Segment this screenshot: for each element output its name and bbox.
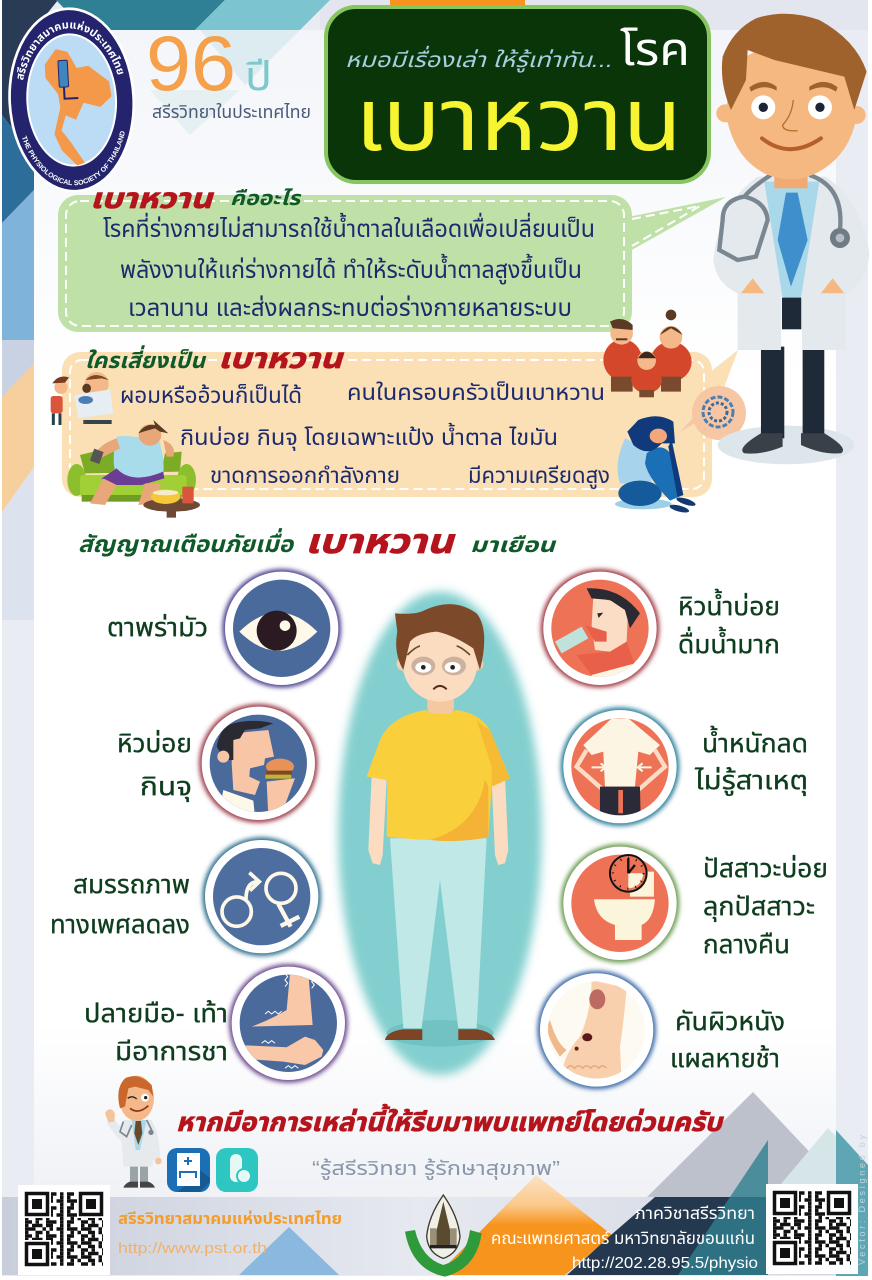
- department URL: http://202.28.95.5/physio: [572, 1255, 758, 1272]
- slogan: “รู้สรีรวิทยา รู้รักษาสุขภาพ”: [312, 1157, 560, 1181]
- warning signs text: สัญญาณเตือนภัยเมื่อ: [78, 528, 294, 557]
- icon: thought bubble with scribble: [680, 386, 746, 440]
- call to action: หากมีอาการเหล่านี้ให้รีบมาพบแพทย์โดยด่วนครับ: [176, 1104, 725, 1137]
- doctor character: [713, 14, 869, 464]
- definition line 1: โรคที่ร่างกายไม่สามารถใช้น้ำตาลในเลือดเพื่อเปลี่ยนเป็น: [103, 212, 595, 243]
- symptom label: weight loss: น้ำหนักลด: [702, 725, 808, 758]
- illustration: stressed woman: [615, 416, 696, 514]
- icon: man drinking water: [541, 569, 659, 688]
- icon: numb feet and hands: [229, 964, 348, 1083]
- symptom label: at night: กลางคืน: [703, 929, 790, 959]
- symptom label: drinks a lot: ดื่มน้ำมาก: [678, 626, 780, 659]
- faculty of medicine seal: [405, 1195, 482, 1277]
- symptom label: reduced: สมรรถภาพ: [73, 869, 190, 899]
- symptom label: thirsty often: หิวน้ำบ่อย: [678, 588, 780, 621]
- illustration: man on sofa: [67, 420, 200, 518]
- word: years: ปี: [245, 55, 272, 99]
- arrives text: มาเยือน: [470, 534, 557, 557]
- central figure and symptom icons: [199, 569, 679, 1089]
- small doctor winking: [105, 1076, 162, 1188]
- icon: toilet at night: [561, 844, 679, 963]
- risk: diet: กินบ่อย กินจุ โดยเฉพาะแป้ง น้ำตาล ไขมัน: [180, 422, 558, 451]
- heading: what is: คืออะไร: [230, 188, 302, 210]
- vector credit: Vector: Designed by: [857, 1134, 867, 1265]
- icon: hospital: [167, 1148, 210, 1192]
- symptom label: wakes to urinate: ลุกปัสสาวะ: [703, 891, 815, 922]
- faculty and university name: คณะแพทยศาสตร์ มหาวิทยาลัยขอนแก่น: [491, 1229, 755, 1248]
- section heading: warning signs: [78, 523, 557, 561]
- icon: blurred vision eye: [222, 569, 341, 688]
- risk: family history: คนในครอบครัวเป็นเบาหวาน: [347, 380, 605, 405]
- heading: diabetes: เบาหวาน: [218, 343, 344, 374]
- risk: stress: มีความเครียดสูง: [468, 463, 610, 489]
- icon: medicine capsule: [216, 1148, 258, 1192]
- title panel: [326, 7, 709, 182]
- illustration: overweight family: [603, 310, 692, 397]
- doctor head: [716, 104, 734, 122]
- definition line 3: เวลานาน และส่งผลกระทบต่อร่างกายหลายระบบ: [128, 294, 572, 322]
- risk: thin or fat: ผอมหรืออ้วนก็เป็นได้: [120, 383, 302, 408]
- symptom label: slow healing: แผลหายช้า: [670, 1043, 780, 1073]
- symptom label: hungry often: หิวบ่อย: [117, 728, 192, 758]
- title tagline: หมอมีเรื่องเล่า ให้รู้เท่าทัน...: [345, 45, 613, 73]
- logo: Physiological Society of Thailand: [8, 7, 135, 190]
- title word: disease: โรค: [620, 23, 690, 75]
- logo ring text: Thai name: สรีรวิทยาสมาคมแห่งประเทศไทย: [17, 21, 124, 80]
- QR code: department website: [766, 1184, 858, 1274]
- society name: สรีรวิทยาสมาคมแห่งประเทศไทย: [118, 1210, 342, 1228]
- symptom label: numbness: มีอาการชา: [115, 1036, 228, 1066]
- symptom label: sexual performance: ทางเพศลดลง: [50, 909, 190, 939]
- diabetes word: เบาหวาน: [305, 523, 455, 561]
- main title: เบาหวาน: [355, 70, 682, 169]
- QR code: society website: [18, 1185, 110, 1275]
- logo ring text: English name: THE PHYSIOLOGICAL SOCIETY OF THAILAND: [22, 131, 125, 186]
- icon: male female symbols: [202, 837, 321, 956]
- icon: map of Thailand: [44, 46, 115, 167]
- panel: who is at risk: [62, 343, 738, 497]
- symptom label: blurred vision: ตาพร่ามัว: [107, 612, 208, 642]
- stethoscope: [719, 175, 840, 260]
- heading: diabetes: เบาหวาน: [90, 183, 214, 214]
- department name: ภาควิชาสรีรวิทยา: [635, 1204, 755, 1223]
- symptom label: hands and feet: ปลายมือ- เท้า: [84, 998, 228, 1028]
- number 96: 96: [146, 19, 236, 107]
- heading: who is at risk: ใครเสี่ยงเป็น: [85, 345, 207, 373]
- society URL: http://www.pst.or.th: [118, 1240, 267, 1257]
- symptom label: unknown cause: ไม่รู้สาเหตุ: [694, 765, 808, 796]
- icon: skin wounds on foot: [537, 971, 656, 1089]
- tired boy: [367, 604, 510, 1047]
- panel: what is diabetes: [58, 183, 726, 332]
- symptom label: eats a lot: กินจุ: [140, 771, 192, 802]
- icon: man eating burger: [199, 704, 318, 823]
- symptom label: itchy skin: คันผิวหนัง: [675, 1006, 785, 1036]
- symptom label: frequent urination: ปัสสาวะบ่อย: [703, 853, 828, 883]
- bottom band: [2, 1092, 868, 1276]
- illustration: thin and fat men: [51, 372, 113, 425]
- risk: no exercise: ขาดการออกกำลังกาย: [210, 463, 400, 488]
- subtitle: สรีรวิทยาในประเทศไทย: [152, 102, 311, 122]
- definition line 2: พลังงานให้แก่ร่างกายได้ ทำให้ระดับน้ำตาลสูงขึ้นเป็น: [120, 253, 582, 285]
- anniversary: 96 years: [146, 19, 311, 122]
- icon: weight loss: [561, 707, 679, 826]
- teal ellipse backdrop: [338, 592, 542, 1075]
